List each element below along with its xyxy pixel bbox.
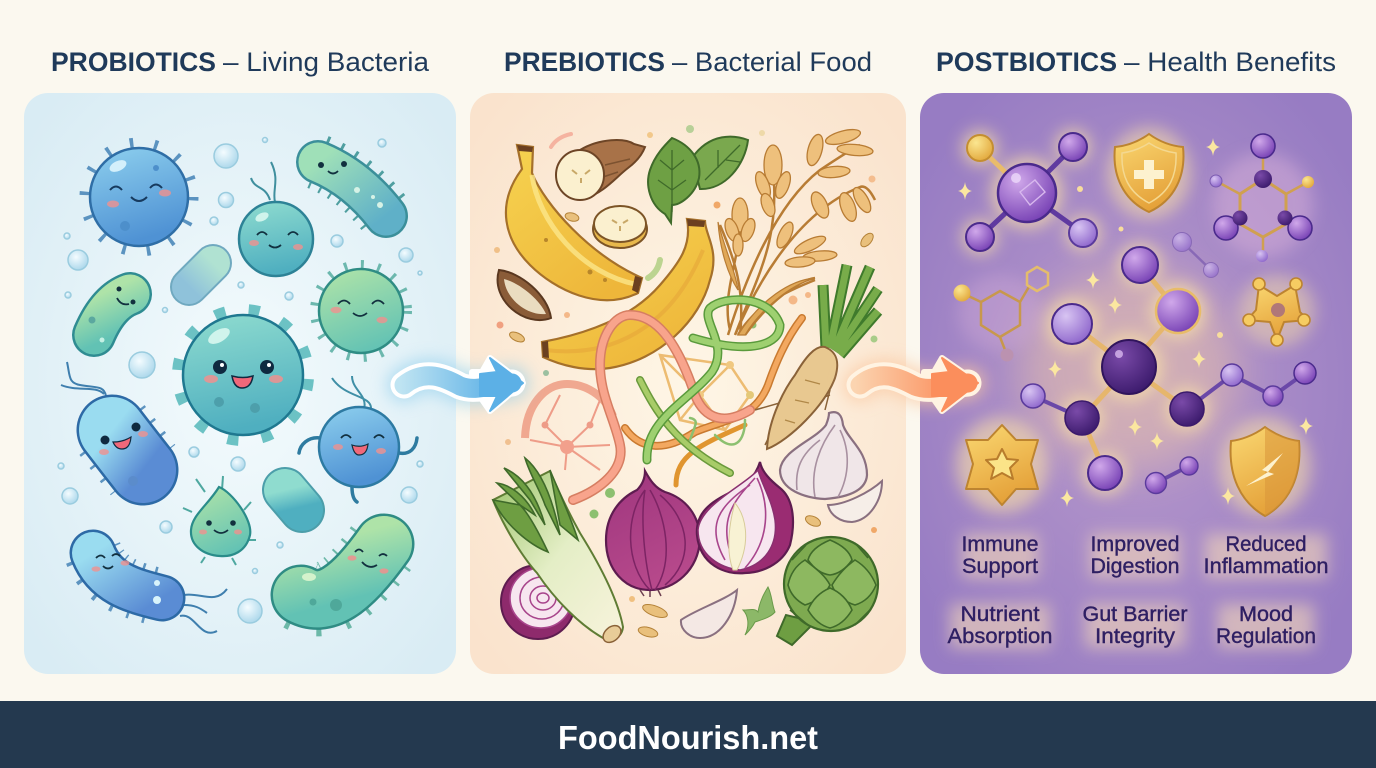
bacterium: green rod — [318, 161, 386, 216]
heading: postbiotics — [936, 47, 1336, 77]
label: immune support: Support — [962, 555, 1038, 578]
seeds and dots — [494, 125, 878, 639]
bacterium: big green bean — [301, 544, 388, 611]
heading: prebiotics — [504, 47, 872, 77]
icon: gold star badge — [956, 417, 1048, 513]
label: mood regulation: Regulation — [1216, 625, 1316, 648]
panel: postbiotics — [920, 93, 1352, 674]
molecule: large faceted top left — [962, 129, 1101, 255]
bacterium: teal round with flagella — [239, 162, 313, 276]
bacterium: green bean — [88, 286, 136, 342]
bacterium: blue rod with tail flagella — [92, 553, 227, 633]
label: mood regulation — [1216, 603, 1316, 648]
food: green leaves — [648, 137, 748, 223]
molecule: hexagon with gold atom — [954, 267, 1048, 362]
heading: postbiotics: POSTBIOTICS — [936, 47, 1117, 77]
label: nutrient absorption: Absorption — [948, 625, 1052, 648]
bacterium: pale pill — [189, 263, 213, 287]
food: garlic clove — [828, 481, 882, 522]
food: parsnip with greens — [755, 265, 878, 449]
label: nutrient absorption — [948, 603, 1052, 648]
label: immune support — [962, 533, 1038, 578]
food: wheat and oats — [718, 127, 875, 335]
heading: postbiotics: – Health Benefits — [1124, 47, 1336, 77]
label: improved digestion: Improved — [1090, 533, 1180, 556]
food: nut — [498, 270, 551, 320]
icon: gold star molecule — [1239, 275, 1315, 347]
label: gut barrier integrity: Integrity — [1095, 625, 1176, 648]
benefit labels glow — [950, 534, 1327, 648]
label: reduced inflammation: Reduced — [1226, 533, 1306, 556]
heading: probiotics — [51, 47, 430, 77]
molecule: faint small — [1172, 232, 1218, 278]
bubbles — [58, 138, 423, 623]
panel background — [24, 93, 456, 674]
label: improved digestion: Digestion — [1090, 555, 1180, 578]
icon: shield with bolt — [1219, 417, 1311, 517]
benefit labels — [948, 533, 1328, 648]
heading: probiotics: PROBIOTICS — [51, 47, 216, 77]
label: nutrient absorption: Nutrient — [960, 603, 1040, 626]
central glow — [1020, 270, 1240, 470]
label: gut barrier integrity: Gut Barrier — [1082, 603, 1188, 626]
label: gut barrier integrity — [1082, 603, 1188, 648]
food: garlic bulb — [780, 412, 867, 499]
heading: prebiotics: PREBIOTICS — [504, 47, 665, 77]
heading: prebiotics: – Bacterial Food — [672, 47, 872, 77]
bacterium: blue round waving — [299, 376, 417, 502]
bacterium: small green teardrop — [183, 476, 256, 565]
food: garlic clove small — [681, 590, 737, 638]
bacterium: large teal smiling cell — [178, 310, 308, 440]
label: reduced inflammation — [1204, 533, 1328, 578]
heading: probiotics: – Living Bacteria — [223, 47, 430, 77]
food: red onion — [606, 471, 700, 597]
panel: probiotics — [24, 93, 456, 674]
panel: prebiotics — [470, 93, 906, 674]
food: artichoke — [777, 537, 878, 645]
icon: shield with plus — [1107, 127, 1191, 219]
label: immune support: Immune — [962, 533, 1038, 556]
fibre strands — [573, 300, 802, 500]
arrow: prebiotics to postbiotics — [860, 358, 978, 411]
footer bar — [0, 701, 1376, 768]
food: banana — [506, 145, 642, 300]
molecule: central — [1021, 243, 1316, 495]
bacterium: blue bean with flagella — [61, 362, 148, 486]
food: herb sprig — [743, 587, 775, 635]
food: red onion slice — [501, 565, 575, 639]
label: mood regulation: Mood — [1239, 603, 1293, 626]
food: taro root with cut face — [556, 140, 645, 200]
bacterium: green round — [314, 264, 408, 358]
molecule: hexagon ring top right — [1210, 134, 1314, 262]
food: cut red onion — [697, 462, 793, 573]
label: improved digestion — [1090, 533, 1180, 578]
food: banana slice — [593, 206, 647, 248]
bacterium: blue round — [85, 143, 193, 251]
panel background — [470, 93, 906, 674]
molecule: small dumbbell — [1146, 457, 1198, 494]
food: leek — [493, 458, 624, 646]
fibre network — [525, 355, 754, 470]
food: banana — [542, 219, 713, 369]
arrow: probiotics to prebiotics — [404, 358, 523, 411]
bacterium: teal pill — [285, 490, 302, 510]
panel background — [920, 93, 1352, 674]
label: reduced inflammation: Inflammation — [1204, 555, 1328, 578]
footer text: FoodNourish.net — [558, 719, 818, 756]
sparkles — [958, 138, 1313, 507]
